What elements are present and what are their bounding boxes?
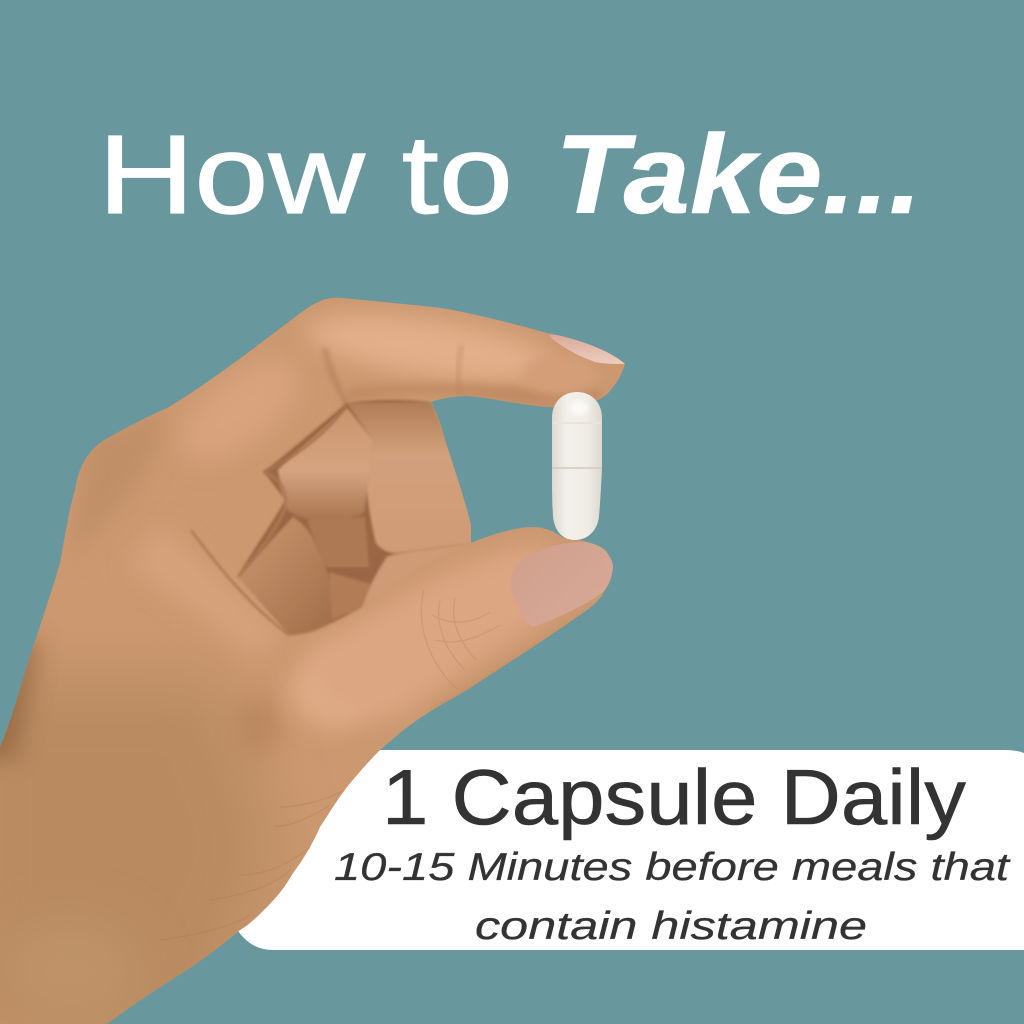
index nail — [549, 335, 625, 364]
callout text: 10-15 Minutes before meals that — [334, 846, 1012, 889]
wrist tone — [0, 680, 280, 1024]
inner finger low — [329, 572, 371, 620]
title — [98, 112, 922, 237]
knuckle segment — [278, 408, 373, 521]
wrist creases — [232, 790, 345, 924]
crease shadow near wrist — [242, 700, 278, 748]
index joint creases — [325, 348, 347, 403]
thumb highlight — [327, 546, 542, 716]
title: How to — [98, 112, 513, 237]
callout text: contain histamine — [475, 905, 867, 948]
ring finger — [238, 517, 332, 635]
thumb edge shade — [452, 665, 505, 699]
index highlight — [307, 309, 546, 384]
palm fold light — [146, 542, 266, 646]
capsule — [552, 392, 602, 540]
hand side shading — [86, 424, 149, 520]
callout heading: 1 Capsule Daily — [382, 753, 966, 841]
thumb mound edge — [238, 472, 286, 577]
middle finger segment — [347, 402, 471, 553]
inner fingers group — [238, 400, 471, 635]
inner finger — [307, 517, 369, 567]
callout text — [334, 846, 1012, 948]
thumb base highlight — [286, 662, 362, 730]
callout panel — [236, 750, 1024, 950]
wrist lower light — [53, 960, 87, 980]
palm crease — [191, 530, 289, 635]
callout: dosage — [334, 753, 1012, 948]
hand back light — [187, 366, 292, 454]
thumb joint creases — [421, 590, 500, 690]
cavity between fingers — [240, 398, 426, 624]
title: Take... — [555, 112, 922, 237]
lower finger fold — [362, 543, 471, 607]
capsule highlight — [570, 401, 588, 415]
index fingertip tone — [528, 362, 589, 396]
illustration: hand holding capsule — [0, 298, 625, 1024]
wrist dark edge — [0, 640, 40, 760]
index shade below — [345, 384, 600, 405]
thumb nail — [511, 542, 613, 627]
hand — [0, 298, 625, 1024]
index underside crease — [264, 403, 347, 472]
